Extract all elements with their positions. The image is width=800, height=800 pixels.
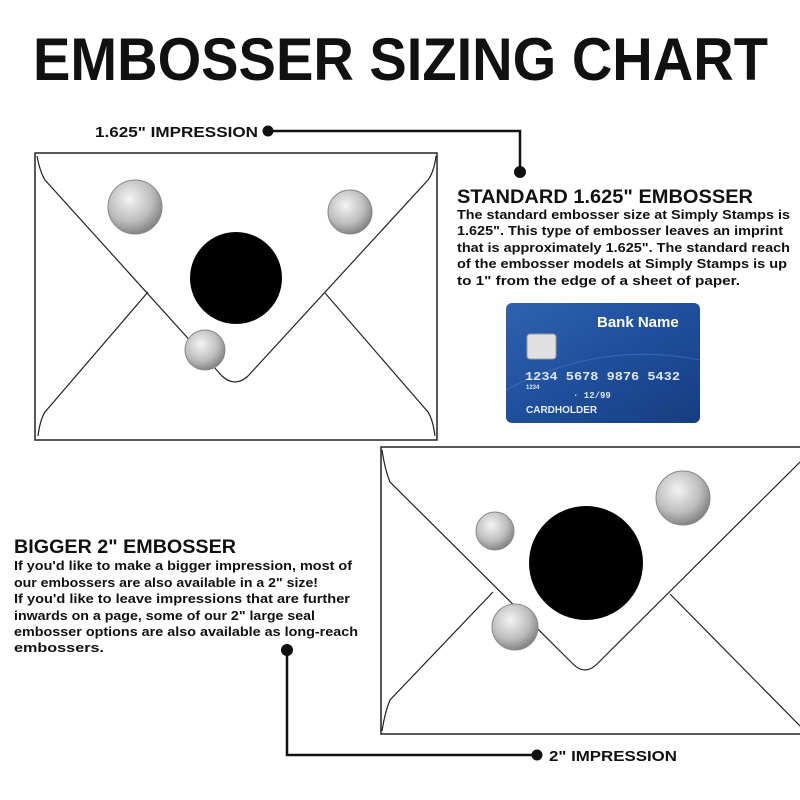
envelope: standard [35, 153, 437, 440]
text block: bigger embosser: embosser options are also available as long-reach [14, 624, 358, 639]
coin: dime [476, 512, 514, 550]
text block: standard embosser: 1.625". This type of embosser leaves an imprint [457, 223, 784, 238]
credit card: 1234 5678 9876 5432 [525, 370, 680, 384]
credit card: 1234 [526, 385, 540, 391]
text block: bigger embosser: embossers. [14, 640, 104, 655]
credit card: Bank Name [597, 314, 679, 331]
coin: quarter [656, 471, 710, 525]
text block: standard embosser: to 1" from the edge of a sheet of paper. [457, 273, 740, 288]
text block: standard embosser: of the embosser models at Simply Stamps is up [457, 256, 787, 271]
text block: bigger embosser: If you'd like to leave impressions that are further [14, 591, 350, 606]
coin: nickel [492, 604, 538, 650]
text block: bigger embosser: our embossers are also available in a 2" size! [14, 575, 318, 590]
impression circle 2 [529, 506, 643, 620]
title: EMBOSSER SIZING CHART [33, 26, 768, 93]
text block: bigger embosser: BIGGER 2" EMBOSSER [14, 537, 236, 558]
credit card: CARDHOLDER [526, 405, 598, 416]
envelope: bigger [381, 447, 800, 734]
text block: bigger embosser: If you'd like to make a bigger impression, most of [14, 558, 353, 573]
text block: bigger embosser: inwards on a page, some of our 2" large seal [14, 608, 315, 623]
credit card: · 12/99 [573, 391, 611, 401]
coin: nickel [328, 190, 372, 234]
text block: standard embosser [457, 187, 790, 288]
text block: standard embosser: that is approximately 1.625". The standard reach [457, 240, 790, 255]
label: 2 impression [281, 644, 677, 765]
coin: quarter [108, 180, 162, 234]
label: 1.625 impression: 1.625" IMPRESSION [95, 124, 258, 141]
label: 2 impression: 2" IMPRESSION [549, 748, 677, 765]
impression circle 1.625 [190, 232, 282, 324]
label: 1.625 impression [95, 124, 526, 178]
coin: dime [185, 330, 225, 370]
text block: standard embosser: STANDARD 1.625" EMBOSSER [457, 187, 753, 208]
text block: bigger embosser [14, 537, 358, 655]
text block: standard embosser: The standard embosser size at Simply Stamps is [457, 207, 790, 222]
credit card [506, 303, 700, 423]
